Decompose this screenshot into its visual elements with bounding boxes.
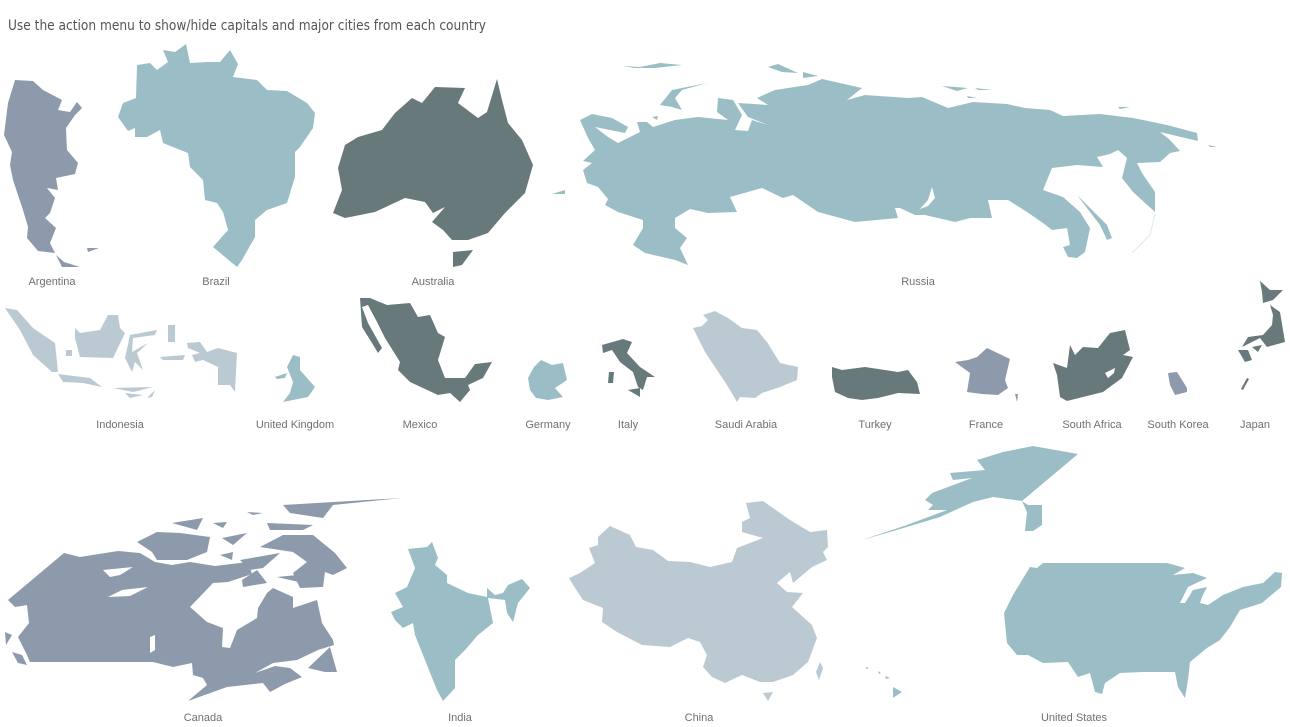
- map: Australia: [333, 79, 533, 267]
- country: China: [569, 501, 828, 724]
- Lake Baikal: [920, 187, 935, 209]
- country: Indonesia: [5, 308, 237, 431]
- map: South Africa: [1053, 330, 1133, 401]
- country: Russia: [580, 63, 1217, 288]
- Canadian islands: [5, 498, 402, 672]
- label: South Africa: South Africa: [1062, 419, 1123, 431]
- map: China: [569, 501, 828, 701]
- label: Russia: Russia: [901, 276, 936, 288]
- map: Russia: [580, 79, 1198, 265]
- label: Australia: Australia: [412, 276, 455, 288]
- country: Saudi Arabia: [693, 311, 798, 431]
- country: Australia: [333, 79, 565, 288]
- country: Italy: [602, 339, 655, 431]
- map: Mexico: [360, 298, 492, 402]
- country: Argentina: [4, 80, 99, 288]
- country: South Korea: [1147, 372, 1209, 431]
- label: Argentina: Argentina: [28, 276, 76, 288]
- label: Turkey: Turkey: [858, 419, 892, 431]
- map: Japan: [1238, 281, 1285, 390]
- map: Argentina: [4, 80, 99, 267]
- label: Japan: Japan: [1240, 419, 1270, 431]
- map: Canada mainland: [8, 551, 334, 701]
- label: Germany: Germany: [525, 419, 571, 431]
- map: Turkey: [832, 367, 920, 400]
- map: Italy: [602, 339, 655, 397]
- label: China: China: [685, 712, 714, 724]
- map: South Korea: [1168, 372, 1187, 395]
- country: Mexico: [360, 298, 492, 431]
- map: Germany: [528, 360, 567, 400]
- label: Mexico: Mexico: [403, 419, 437, 431]
- country: Germany: [525, 360, 571, 431]
- country: United Kingdom: [256, 355, 334, 431]
- label: Canada: Canada: [184, 712, 223, 724]
- country: South Africa: [1053, 330, 1133, 431]
- label: South Korea: South Korea: [1147, 419, 1209, 431]
- map: France: [955, 348, 1018, 402]
- label: France: France: [969, 419, 1003, 431]
- Kuril islands: [1132, 215, 1155, 253]
- label: India: India: [448, 712, 473, 724]
- country: India: [391, 542, 530, 724]
- country: United States: [862, 446, 1282, 724]
- label: Brazil: Brazil: [202, 276, 230, 288]
- country: Brazil: [118, 44, 315, 288]
- map: Brazil: [118, 44, 315, 267]
- Russian islands: [622, 63, 1217, 240]
- label: United States: United States: [1041, 712, 1108, 724]
- country: Turkey: [832, 367, 920, 431]
- map: Saudi Arabia: [693, 311, 798, 402]
- country: Canada: [5, 498, 402, 724]
- country: France: [955, 348, 1018, 431]
- label: Italy: Italy: [618, 419, 639, 431]
- label: United Kingdom: United Kingdom: [256, 419, 334, 431]
- Canadian lakes: [103, 567, 155, 653]
- map: contiguous states: [1004, 563, 1282, 698]
- island: [552, 190, 565, 194]
- map: Hawaii: [866, 667, 902, 698]
- map: India: [391, 542, 530, 701]
- map: Alaska: [862, 446, 1078, 540]
- country: Japan: [1238, 281, 1285, 431]
- map: Indonesia: [5, 308, 237, 398]
- title: Use the action menu to show/hide capitals and major cities from each country: [8, 18, 486, 34]
- label: Saudi Arabia: Saudi Arabia: [715, 419, 778, 431]
- map: United Kingdom: [275, 355, 315, 402]
- label: Indonesia: Indonesia: [96, 419, 145, 431]
